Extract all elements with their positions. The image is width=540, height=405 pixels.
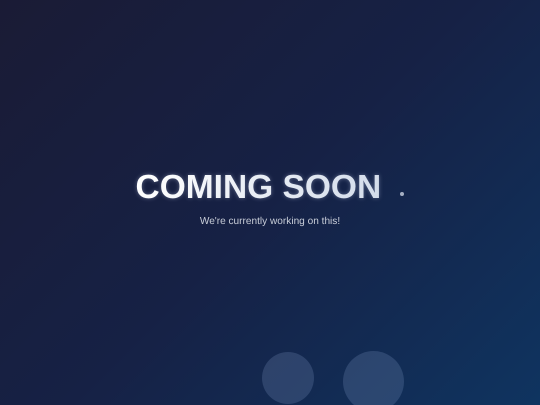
icon: right decorative circle bbox=[343, 351, 404, 405]
title: COMING SOON bbox=[136, 168, 381, 206]
icon: left decorative circle bbox=[262, 352, 314, 404]
icon: loading dot bbox=[400, 192, 404, 196]
subtitle text: We're currently working on this! bbox=[200, 216, 340, 226]
